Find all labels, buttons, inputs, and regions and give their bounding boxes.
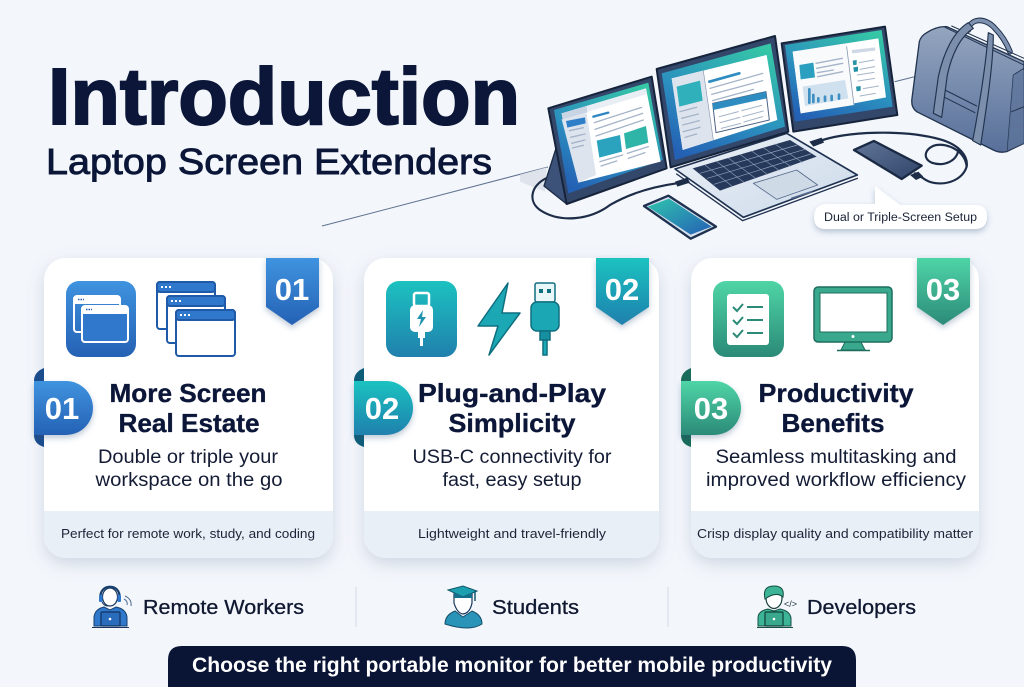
monitor stand [544,133,567,204]
panel: productivity benefits [681,258,979,558]
corner number tab 03: 03 [926,272,960,307]
side number tab 03 [681,368,741,447]
card heading [758,378,914,438]
card heading: Real Estate [118,408,260,438]
label: Students [492,597,579,619]
card heading: Productivity [758,378,914,408]
bottom call-to-action banner [168,646,856,687]
label: Developers [807,597,916,619]
left monitor [548,77,667,204]
card footnote: Lightweight and travel-friendly [418,526,607,541]
callout: dual or triple screen setup [814,186,987,229]
card description: USB-C connectivity for [412,447,612,468]
card description: improved workflow efficiency [706,470,967,491]
icon: remote worker with headset [92,587,131,628]
travel bag [912,20,1024,152]
icon: stacked windows [157,282,235,356]
desk line behind the bag [895,77,915,82]
card footer strip [364,511,659,558]
right monitor [782,27,897,132]
icon: lightning bolt [478,283,520,355]
illustration: triple screen laptop setup [520,20,1024,239]
card heading: Benefits [782,408,884,438]
power bank [854,141,923,180]
side number tab 01: 01 [45,391,79,426]
icon: developer at laptop [757,586,797,628]
icon: checklist on green tile [713,281,784,357]
callout: dual or triple screen setup: Dual or Triple-Screen Setup [824,212,977,224]
desk shadow [520,167,547,192]
left cable [532,178,677,218]
title: Introduction [48,52,520,141]
corner number tab 01 [266,258,319,325]
phone [644,196,716,239]
icon: windows on blue tile [66,281,136,357]
side number tab 03: 03 [694,391,728,426]
audience: developers [757,586,916,628]
corner number tab 01: 01 [275,272,309,307]
card footnote: Crisp display quality and compatibility matter [697,526,974,541]
icon: usb-c plug on teal tile [386,281,457,357]
subtitle: Laptop Screen Extenders [46,141,492,182]
corner number tab 02 [596,258,649,325]
card footer strip [691,511,979,558]
panel: more screen real estate [34,258,333,558]
card description [94,447,282,491]
panel: plug-and-play simplicity [354,258,659,558]
desk edge line [322,167,548,226]
card description: Seamless multitasking and [716,447,956,468]
card footnote: Perfect for remote work, study, and coding [61,526,315,541]
corner number tab 02: 02 [605,272,639,307]
center laptop screen [657,36,788,167]
card description: workspace on the go [94,470,282,491]
icon: monitor [814,287,892,350]
laptop base [675,133,857,221]
audience: remote workers [92,587,304,628]
icon: usb plug [531,283,559,355]
side number tab 02: 02 [365,391,399,426]
card heading: More Screen [110,378,266,408]
card heading [418,378,607,438]
side number tab 02 [354,368,413,447]
card footer strip [44,511,333,558]
card description [412,447,612,491]
card description: fast, easy setup [442,470,582,491]
card heading: Simplicity [448,408,576,438]
label: Remote Workers [143,597,304,619]
right cable [815,133,967,183]
card heading: Plug-and-Play [418,378,607,408]
card heading [110,378,266,438]
corner number tab 03 [917,258,970,325]
audience: students [445,586,579,628]
card description [706,447,967,491]
side number tab 01 [34,368,93,447]
card description: Double or triple your [98,447,279,468]
icon: student with graduation cap [445,586,482,628]
icon: developer at laptop: </> [784,599,797,609]
bottom call-to-action banner: Choose the right portable monitor for better mobile productivity [192,654,832,677]
